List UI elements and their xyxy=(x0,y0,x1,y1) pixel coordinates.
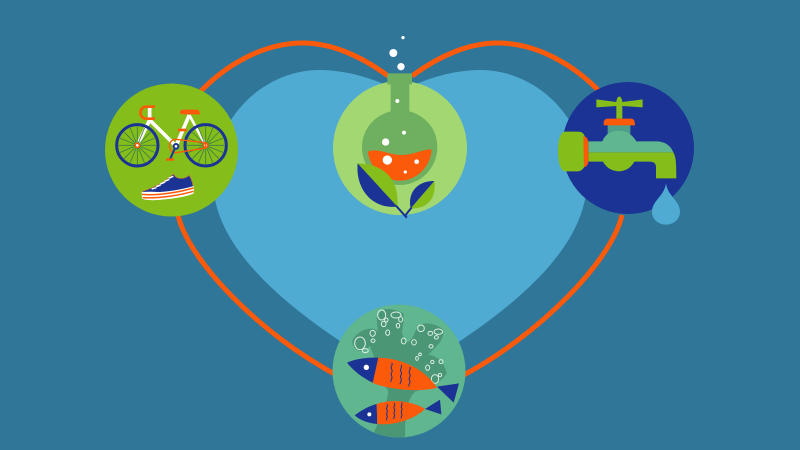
icon: water drop xyxy=(652,183,680,225)
pale green circle xyxy=(333,81,467,215)
panel: water tap xyxy=(558,82,694,225)
icon: leaves xyxy=(357,163,435,218)
icon: bicycle xyxy=(117,107,226,166)
icon: tap xyxy=(558,96,676,178)
light blue heart xyxy=(213,70,587,378)
icon: small fish xyxy=(355,400,441,424)
orange heart outline xyxy=(178,43,622,377)
panel: bicycle and shoe xyxy=(105,84,238,216)
icon: shoe xyxy=(142,174,194,200)
teal circle xyxy=(332,304,466,438)
panel: flask and leaves xyxy=(333,36,467,218)
icon: large fish xyxy=(347,358,459,403)
green circle xyxy=(105,84,238,216)
icon: flask xyxy=(362,73,437,185)
panel: fish and algae xyxy=(332,304,466,445)
bubbles xyxy=(382,36,419,174)
algae xyxy=(352,309,447,445)
navy circle xyxy=(562,82,694,214)
